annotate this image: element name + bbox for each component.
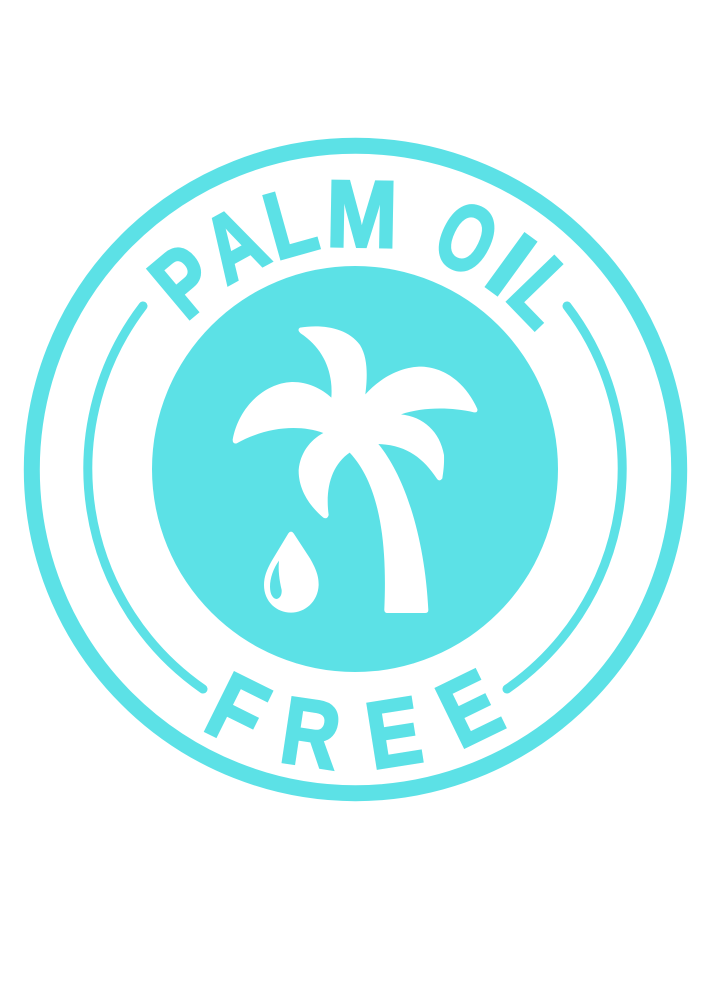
heading: FREE: E <box>422 649 517 768</box>
icon: palm tree <box>233 326 477 613</box>
outer ring <box>32 146 679 793</box>
heading: PALM OIL: I <box>469 214 552 315</box>
heading: FREE: F <box>191 651 284 769</box>
heading: PALM OIL: L <box>253 165 328 280</box>
heading: PALM OIL: O <box>419 178 514 298</box>
heading: PALM OIL: L <box>489 239 598 347</box>
heading: FREE: E <box>359 676 429 789</box>
icon: oil drop <box>264 532 319 613</box>
heading: PALM OIL: P <box>131 225 238 338</box>
heading: FREE: R <box>274 677 347 790</box>
left arc line <box>88 306 203 689</box>
heading: PALM OIL: M <box>325 161 398 268</box>
heading: PALM OIL: A <box>186 186 284 304</box>
heading: PALM OIL <box>131 161 598 347</box>
inner filled circle <box>152 266 558 672</box>
right arc line <box>507 306 622 689</box>
heading: FREE <box>191 649 517 790</box>
